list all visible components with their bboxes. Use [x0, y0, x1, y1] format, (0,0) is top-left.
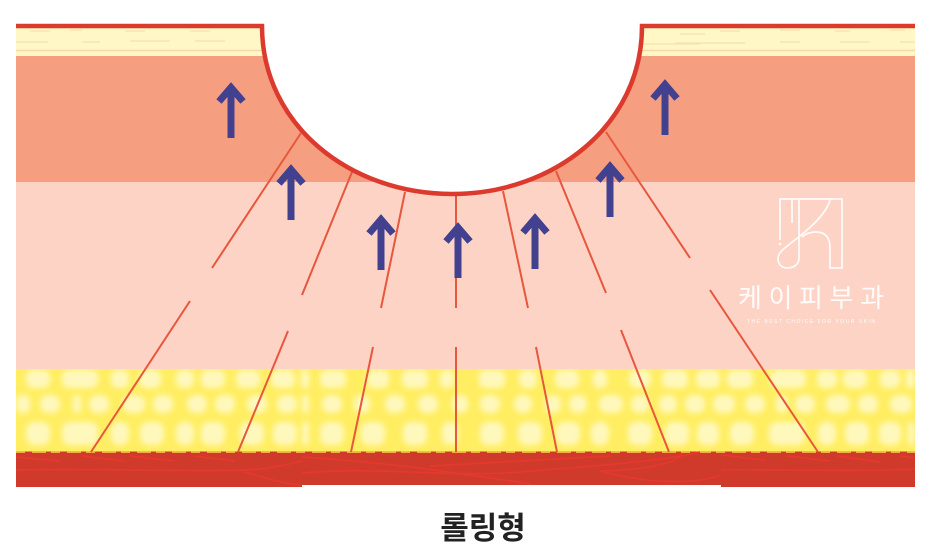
layer: lower dermis: [16, 182, 915, 369]
scar depression bowl: [262, 24, 642, 194]
arrow 4: [446, 228, 470, 278]
tagline: THE BEST CHOICE FOR YOUR SKIN: [747, 319, 875, 325]
arrow 7: [653, 84, 677, 135]
watermark logo: [738, 199, 884, 325]
clinic name: 케이피부과: [738, 283, 884, 313]
arrow 5: [523, 218, 547, 269]
title: 롤링형: [440, 511, 526, 546]
arrow 6: [598, 166, 622, 217]
arrows pointing up: [219, 84, 677, 278]
logo dot: [779, 243, 781, 245]
layer: muscle: [16, 452, 915, 487]
layer: fat cells: [16, 369, 915, 453]
arrow 2: [279, 170, 303, 220]
layer: epidermis: [16, 26, 915, 56]
arrow 3: [369, 220, 393, 270]
arrow 1: [219, 88, 243, 138]
layer: upper dermis: [16, 56, 915, 182]
skin surface outline: [16, 26, 915, 194]
fibrous septa tethers: [91, 132, 818, 452]
logo mark: [778, 199, 842, 268]
